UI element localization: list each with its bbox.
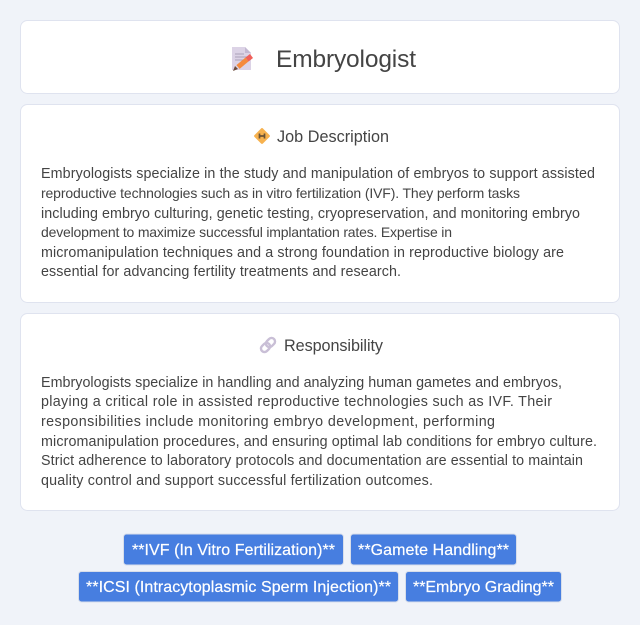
panel: job description <box>20 104 620 302</box>
icon: diamond sign <box>254 128 270 144</box>
heading: responsibility: Responsibility <box>284 337 384 355</box>
tag: Gamete Handling <box>350 534 516 565</box>
text block: job description: Embryologists specialize in the study and manipulation of embryos to support assisted <box>41 166 595 182</box>
text block: responsibility: playing a critical role in assisted reproductive technologies such as IVF. Their <box>41 394 552 410</box>
heading: job description: Job Description <box>277 128 389 146</box>
tag: ICSI: **ICSI (Intracytoplasmic Sperm Injection)** <box>86 579 391 596</box>
text block: responsibility: Strict adherence to laboratory protocols and documentation are essential to maintain <box>41 453 583 469</box>
text block: job description: micromanipulation techniques and a strong foundation in reproductive biology are <box>41 245 564 261</box>
icon: chain link <box>260 337 276 353</box>
text block: responsibility: micromanipulation procedures, and ensuring optimal lab conditions for embryo culture. <box>41 434 597 450</box>
text block: job description: reproductive technologies such as in vitro fertilization (IVF). They perform tasks <box>41 185 520 201</box>
text block: job description: development to maximize successful implantation rates. Expertise in <box>41 224 452 240</box>
text block: responsibility: quality control and support successful fertilization outcomes. <box>41 473 433 489</box>
tag: IVF: **IVF (In Vitro Fertilization)** <box>132 542 335 559</box>
tag: Embryo Grading <box>406 572 562 602</box>
text block: job description: including embryo culturing, genetic testing, cryopreservation, and monitoring embryo <box>41 206 580 222</box>
panel: responsibility <box>20 314 620 510</box>
tag: IVF <box>124 534 344 565</box>
text block: job description: essential for advancing fertility treatments and research. <box>41 264 401 280</box>
text block: responsibility <box>41 375 597 489</box>
tag: Gamete Handling: **Gamete Handling** <box>358 542 509 559</box>
title: Embryologist <box>276 46 416 73</box>
text block: responsibility: responsibilities include monitoring embryo development, performing <box>41 414 495 430</box>
panel: title card <box>20 20 620 94</box>
tag: ICSI <box>78 572 398 602</box>
tag: Embryo Grading: **Embryo Grading** <box>413 579 554 596</box>
text block: job description <box>41 166 595 280</box>
icon: document with pencil <box>232 47 252 71</box>
text block: responsibility: Embryologists specialize in handling and analyzing human gametes and embryos, <box>41 375 562 391</box>
